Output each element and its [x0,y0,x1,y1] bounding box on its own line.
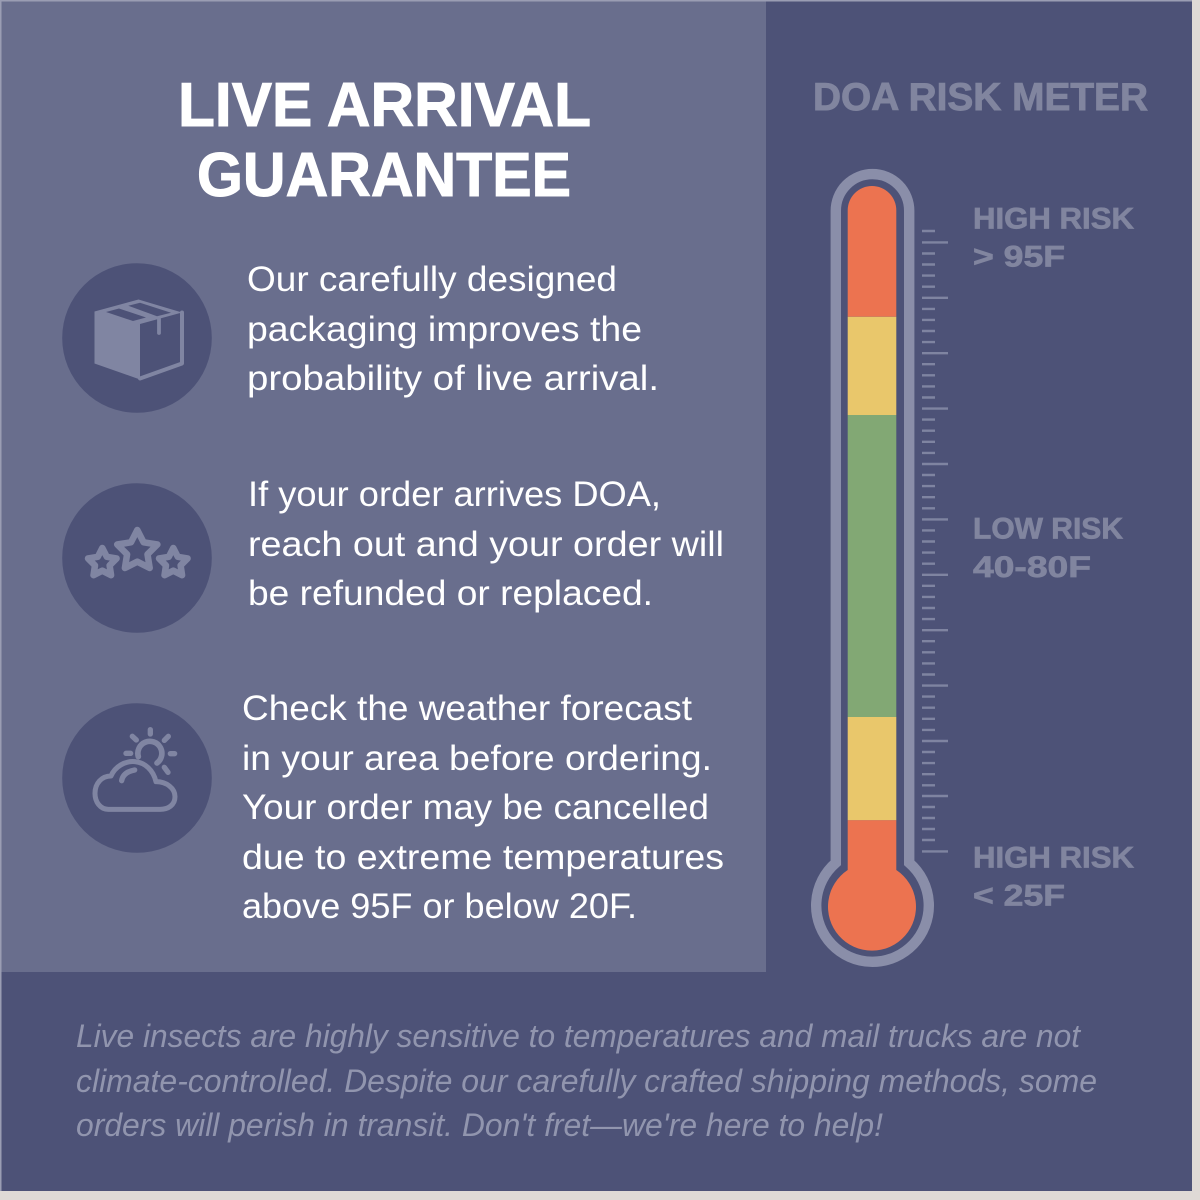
text: packaging: packaging improves the [247,310,642,349]
title: GUARANTEE [197,141,571,210]
scale ticks [922,231,948,851]
text: weather: in your area before ordering. [242,739,712,778]
text: refund: reach out and your order will [248,525,724,564]
text: refund: be refunded or replaced. [248,574,653,613]
text: weather: Check the weather forecast [242,689,692,728]
label: high risk above 95F: > 95F [973,240,1065,274]
label: low risk 40-80F [973,512,1123,584]
heading: DOA risk meter: DOA RISK METER [813,76,1148,119]
footer note [76,1018,1097,1143]
footer note: Live insects are highly sensitive to temperatures and mail trucks are not [76,1018,1081,1054]
text: packaging [247,260,659,398]
temperature scale fill [828,186,916,951]
text: weather: above 95F or below 20F. [242,887,637,926]
label: high risk below 25F [973,842,1134,912]
label: high risk above 95F [973,202,1134,274]
title [178,71,591,210]
footer note: climate-controlled. Despite our carefully crafted shipping methods, some [76,1063,1097,1099]
text: refund: If your order arrives DOA, [248,475,661,514]
title: LIVE ARRIVAL [178,71,591,140]
text: weather [242,689,724,926]
icon: three stars [62,483,212,633]
icon: sun and cloud [62,703,212,853]
text: weather: Your order may be cancelled [242,788,709,827]
text: weather: due to extreme temperatures [242,838,724,877]
text: packaging: probability of live arrival. [247,359,659,398]
thermometer [816,174,948,962]
label: high risk below 25F: HIGH RISK [973,842,1134,874]
footer note: orders will perish in transit. Don't fret—we're here to help! [76,1107,883,1143]
panel: live arrival guarantee [2,2,766,972]
label: low risk 40-80F: 40-80F [973,551,1091,584]
label: high risk above 95F: HIGH RISK [973,202,1134,236]
icon: package box [62,263,212,413]
label: high risk below 25F: < 25F [973,880,1065,912]
text: refund [248,475,724,613]
label: low risk 40-80F: LOW RISK [973,512,1123,546]
thermometer outline [816,174,929,962]
text: packaging: Our carefully designed [247,260,617,299]
